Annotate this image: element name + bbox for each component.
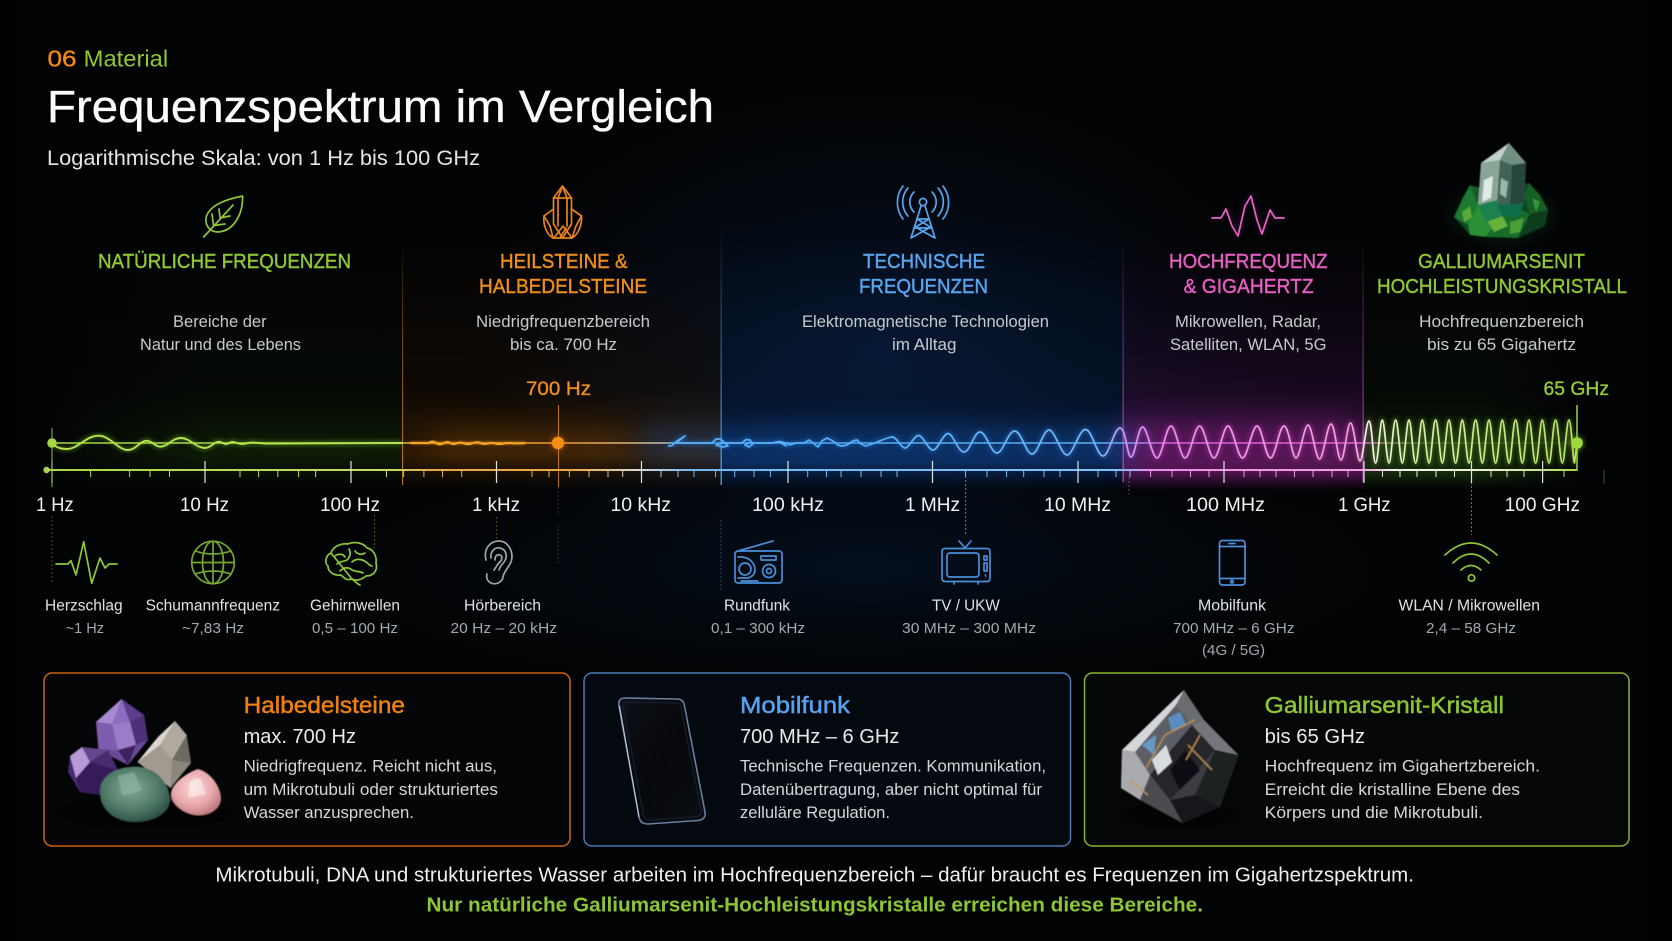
section: healing stones: Niedrigfrequenzbereich bbox=[476, 313, 650, 331]
section: technical frequencies: FREQUENZEN bbox=[859, 276, 988, 298]
icon: radio tower bbox=[897, 186, 949, 238]
item: TV / UKW: TV / UKW bbox=[932, 598, 1000, 615]
scale labels: 100 GHz bbox=[1505, 494, 1580, 516]
section: natural frequencies: Bereiche der bbox=[173, 313, 267, 331]
section: natural frequencies bbox=[98, 251, 351, 354]
icon: wifi bbox=[1445, 543, 1497, 581]
section: gallium arsenide: HOCHLEISTUNGSKRISTALL bbox=[1377, 276, 1627, 298]
marker: 700 Hz dot bbox=[550, 435, 566, 451]
ambient navy glow below axis bbox=[300, 440, 1420, 700]
scale labels: 100 Hz bbox=[320, 494, 380, 516]
section: gallium arsenide bbox=[1377, 251, 1627, 354]
panel: Halbedelsteine: um Mikrotubuli oder strukturiertes bbox=[244, 781, 498, 799]
frequency scale axis bbox=[43, 405, 1577, 487]
spectrum zone tints bbox=[40, 220, 1580, 490]
scale labels: 1 kHz bbox=[472, 494, 520, 516]
item: WLAN / Mikrowellen: WLAN / Mikrowellen bbox=[1398, 598, 1540, 615]
item: Mobilfunk: 700 MHz – 6 GHz bbox=[1173, 620, 1294, 637]
section: healing stones: bis ca. 700 Hz bbox=[510, 336, 617, 354]
footer statement: Mikrotubuli, DNA und strukturiertes Wasser arbeiten im Hochfrequenzbereich – dafür braucht es Frequenzen im Gigahertzspektrum. bbox=[215, 864, 1414, 887]
item: WLAN / Mikrowellen bbox=[1398, 543, 1540, 637]
item: Rundfunk: 0,1 – 300 kHz bbox=[711, 620, 805, 637]
scale labels: 100 MHz bbox=[1186, 494, 1265, 516]
item: Herzschlag: ~1 Hz bbox=[66, 620, 104, 637]
icon: magenta pulse bbox=[1212, 196, 1284, 236]
icon: smartphone bbox=[1220, 540, 1245, 585]
scale labels: 1 Hz bbox=[36, 494, 74, 516]
zone dividers bbox=[402, 225, 1364, 487]
icon: ear bbox=[485, 541, 512, 584]
subtitle: Logarithmische Skala: von 1 Hz bis 100 GHz bbox=[47, 146, 480, 170]
item: TV / UKW bbox=[902, 541, 1036, 637]
section: technical frequencies: Elektromagnetische Technologien bbox=[802, 313, 1049, 331]
horizontal spectrum center line bbox=[52, 441, 1577, 445]
header label: 06 bbox=[48, 46, 76, 72]
panel: Mobilfunk: Technische Frequenzen. Kommunikation, bbox=[740, 758, 1046, 776]
section: high frequency: Mikrowellen, Radar, bbox=[1175, 313, 1321, 331]
icon: brain bbox=[326, 543, 377, 585]
scale labels: 100 kHz bbox=[752, 494, 824, 516]
section: natural frequencies: NATÜRLICHE FREQUENZEN bbox=[98, 251, 351, 273]
item: Schumannfrequenz: Schumannfrequenz bbox=[146, 598, 280, 615]
panel: Halbedelsteine: Niedrigfrequenz. Reicht nicht aus, bbox=[244, 758, 497, 776]
section: healing stones: HALBEDELSTEINE bbox=[479, 276, 647, 298]
image: clear crystal bbox=[1121, 690, 1238, 829]
panel: Mobilfunk: Mobilfunk bbox=[740, 692, 851, 718]
section: gallium arsenide: bis zu 65 Gigahertz bbox=[1427, 336, 1576, 354]
item: Herzschlag bbox=[45, 542, 123, 637]
title: Frequenzspektrum im Vergleich bbox=[47, 81, 714, 132]
panel: Galliumarsenit-Kristall: Körpers und die Mikrotubuli. bbox=[1265, 804, 1483, 822]
item: Gehirnwellen bbox=[310, 543, 400, 637]
label: 65 GHz: 65 GHz bbox=[1544, 378, 1609, 400]
item: Schumannfrequenz: ~7,83 Hz bbox=[182, 620, 244, 637]
marker: 65 GHz dot bbox=[1569, 435, 1585, 451]
section: technical frequencies: im Alltag bbox=[892, 336, 956, 354]
item: TV / UKW: 30 MHz – 300 MHz bbox=[902, 620, 1036, 637]
icon: globe bbox=[192, 541, 234, 584]
panel: Halbedelsteine: Wasser anzusprechen. bbox=[244, 804, 414, 822]
section: gallium arsenide: Hochfrequenzbereich bbox=[1419, 313, 1584, 331]
item: Hörbereich: 20 Hz – 20 kHz bbox=[450, 620, 557, 637]
section: high frequency: & GIGAHERTZ bbox=[1184, 276, 1314, 298]
item: Herzschlag: Herzschlag bbox=[45, 598, 123, 615]
panel: Mobilfunk bbox=[584, 673, 1070, 846]
item: Rundfunk bbox=[711, 541, 805, 637]
scale labels: 10 kHz bbox=[610, 494, 671, 516]
image: smartphone bbox=[619, 698, 705, 824]
scale labels: 1 MHz bbox=[905, 494, 960, 516]
panel: Galliumarsenit-Kristall bbox=[1084, 673, 1629, 846]
icon: heartbeat bbox=[56, 542, 117, 583]
drop lines from axis to items bbox=[52, 470, 1604, 592]
panel: Halbedelsteine: Halbedelsteine bbox=[244, 692, 405, 718]
header label: Material bbox=[84, 46, 168, 72]
icon: television bbox=[942, 541, 990, 584]
section: high frequency bbox=[1169, 251, 1328, 354]
scale labels bbox=[36, 494, 1580, 516]
item: Schumannfrequenz bbox=[146, 541, 280, 637]
panel: Halbedelsteine bbox=[44, 673, 570, 846]
section: gallium arsenide: GALLIUMARSENIT bbox=[1418, 251, 1585, 273]
section: high frequency: HOCHFREQUENZ bbox=[1169, 251, 1328, 273]
section: natural frequencies: Natur und des Lebens bbox=[140, 336, 301, 354]
item: Gehirnwellen: 0,5 – 100 Hz bbox=[312, 620, 398, 637]
section: technical frequencies: TECHNISCHE bbox=[863, 251, 985, 273]
header label bbox=[48, 46, 168, 72]
icon: leaf bbox=[204, 196, 243, 237]
panel: Galliumarsenit-Kristall: Galliumarsenit-Kristall bbox=[1265, 692, 1504, 718]
panel: Mobilfunk: 700 MHz – 6 GHz bbox=[740, 726, 899, 748]
panel: Mobilfunk: zelluläre Regulation. bbox=[740, 804, 890, 822]
icon: orange crystals bbox=[544, 186, 582, 238]
scale labels: 1 GHz bbox=[1338, 494, 1390, 516]
image: green gallium arsenide crystal bbox=[1440, 143, 1564, 251]
panel: Halbedelsteine: max. 700 Hz bbox=[244, 726, 356, 748]
section: healing stones: HEILSTEINE & bbox=[500, 251, 628, 273]
footer highlight: Nur natürliche Galliumarsenit-Hochleistungskristalle erreichen diese Bereiche. bbox=[426, 894, 1203, 917]
item: Hörbereich: Hörbereich bbox=[464, 598, 541, 615]
section: technical frequencies bbox=[802, 251, 1049, 354]
section: healing stones bbox=[476, 251, 650, 354]
item: Gehirnwellen: Gehirnwellen bbox=[310, 598, 400, 615]
item: Mobilfunk bbox=[1173, 540, 1294, 659]
panel: Galliumarsenit-Kristall: Hochfrequenz im Gigahertzbereich. bbox=[1265, 758, 1540, 776]
icon: radio bbox=[735, 541, 782, 583]
image: gemstones bbox=[55, 699, 235, 828]
item: Hörbereich bbox=[450, 541, 557, 637]
item: Rundfunk: Rundfunk bbox=[724, 598, 790, 615]
scale labels: 10 MHz bbox=[1044, 494, 1111, 516]
ambient blue glow bbox=[460, 75, 1300, 615]
panel: Galliumarsenit-Kristall: Erreicht die kristalline Ebene des bbox=[1265, 781, 1520, 799]
scale labels: 10 Hz bbox=[180, 494, 229, 516]
item: WLAN / Mikrowellen: 2,4 – 58 GHz bbox=[1426, 620, 1516, 637]
panel: Galliumarsenit-Kristall: bis 65 GHz bbox=[1265, 726, 1365, 748]
label: 700 Hz: 700 Hz bbox=[526, 378, 591, 400]
item: Mobilfunk: Mobilfunk bbox=[1198, 598, 1266, 615]
panel: Mobilfunk: Datenübertragung, aber nicht optimal für bbox=[740, 781, 1043, 799]
marker: start dot bbox=[47, 438, 57, 448]
item: Mobilfunk: (4G / 5G) bbox=[1202, 642, 1265, 659]
section: high frequency: Satelliten, WLAN, 5G bbox=[1170, 336, 1326, 354]
frequency wave bbox=[52, 420, 1577, 463]
